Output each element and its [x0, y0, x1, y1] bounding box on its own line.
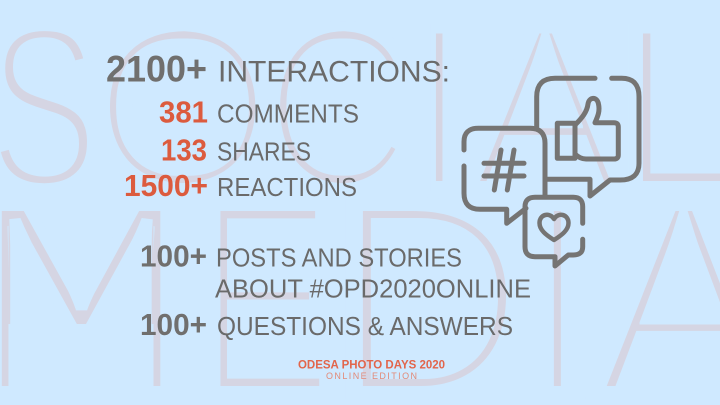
- icon: social media speech bubbles: [464, 78, 639, 266]
- stat: 1500+ reactions: 1500+: [124, 168, 208, 203]
- stat: 381 comments: 381: [159, 95, 208, 130]
- background word: MEDIA: [2, 211, 720, 386]
- stat: 133 shares: SHARES: [217, 137, 311, 167]
- stat: 381 comments: [159, 95, 359, 130]
- stat: 381 comments: COMMENTS: [217, 99, 359, 129]
- stat: 100+ questions and answers: [140, 307, 513, 342]
- icon: hashtag bubble: [464, 128, 545, 223]
- stat: 2100+ interactions: 2100+: [106, 49, 207, 90]
- footer: event name: ONLINE EDITION: [326, 371, 417, 381]
- stat: 100+ posts and stories: [140, 239, 531, 303]
- stat: 100+ questions and answers: 100+: [140, 307, 207, 342]
- stat: 100+ posts and stories: 100+: [140, 239, 207, 274]
- footer: event name: [298, 357, 445, 381]
- stat: 133 shares: [161, 133, 311, 168]
- stat: 100+ posts and stories: ABOUT #OPD2020ONLINE: [215, 273, 531, 303]
- stat: 100+ posts and stories: POSTS AND STORIES: [216, 243, 462, 273]
- stat: 133 shares: 133: [161, 133, 207, 168]
- stat: 2100+ interactions: [106, 49, 450, 90]
- icon: thumbs-up bubble: [537, 78, 639, 196]
- stat: 2100+ interactions: INTERACTIONS:: [218, 56, 450, 89]
- background word: SOCIAL: [0, 0, 720, 235]
- icon: heart bubble: [525, 197, 583, 266]
- stat: 1500+ reactions: [124, 168, 357, 203]
- stat: 1500+ reactions: REACTIONS: [217, 172, 357, 202]
- stat: 100+ questions and answers: QUESTIONS & ANSWERS: [217, 311, 513, 341]
- footer: event name: ODESA PHOTO DAYS 2020: [298, 357, 445, 371]
